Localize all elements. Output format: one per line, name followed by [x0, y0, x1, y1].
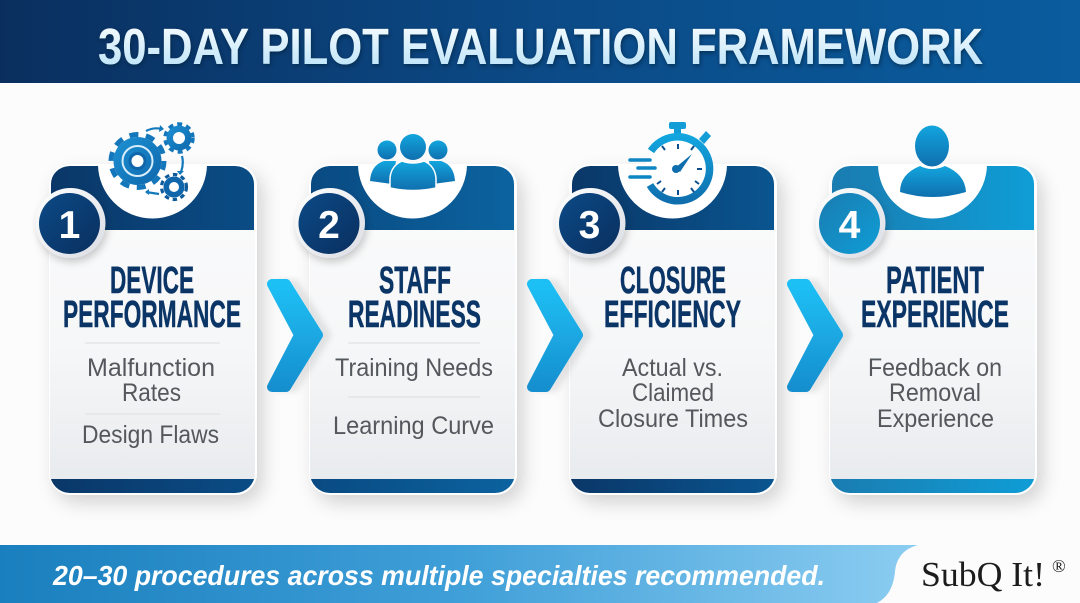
text: malfunction rates: Malfunction: [87, 354, 215, 382]
arrow 2: [532, 284, 578, 387]
icon: gears: [111, 124, 193, 200]
heading: PERFORMANCE: [63, 294, 241, 336]
logo: ®: [1052, 556, 1066, 576]
heading: EFFICIENCY: [604, 294, 741, 336]
footer banner: [0, 545, 918, 603]
title banner: [0, 0, 1080, 83]
heading: [348, 260, 481, 336]
badge 2: 2: [318, 204, 340, 247]
text: malfunction rates: [87, 354, 215, 407]
badge 1: [36, 188, 106, 258]
panel: device performance: [36, 110, 257, 495]
text: closure times: Actual vs.: [622, 354, 723, 382]
icon: team: [370, 134, 455, 190]
text: closure times: Claimed: [632, 379, 714, 407]
text: training needs: Training Needs: [335, 354, 493, 382]
heading: [861, 260, 1009, 336]
badge 3: [556, 188, 626, 258]
icon: person: [900, 126, 966, 197]
text: closure times: Closure Times: [598, 405, 748, 433]
arrow 3: [792, 284, 838, 387]
footer text: 20–30 procedures across multiple specialties recommended.: [52, 560, 825, 591]
heading: [63, 260, 241, 336]
text: feedback: Experience: [877, 405, 994, 433]
text: feedback: Removal: [889, 379, 981, 407]
text: closure times: [598, 354, 748, 433]
arrow 1: [272, 284, 318, 387]
text: feedback: Feedback on: [868, 354, 1002, 382]
badge 4: 4: [839, 204, 861, 247]
icon: stopwatch: [630, 122, 711, 201]
heading: PATIENT: [886, 260, 984, 302]
text: malfunction rates: Rates: [122, 379, 181, 407]
panel: closure efficiency: [556, 110, 777, 495]
badge 1: 1: [59, 204, 80, 247]
heading: STAFF: [379, 260, 451, 302]
text: design flaws: Design Flaws: [82, 421, 219, 449]
logo: SubQ It!: [921, 555, 1045, 594]
heading: READINESS: [348, 294, 481, 336]
heading: [604, 260, 741, 336]
panel: patient experience: [816, 110, 1037, 495]
badge 4: [816, 188, 886, 258]
heading: DEVICE: [110, 260, 194, 302]
panel: staff readiness: [295, 110, 517, 495]
badge 2: [295, 188, 365, 258]
text: feedback: [868, 354, 1002, 433]
badge 3: 3: [579, 204, 600, 247]
heading: CLOSURE: [620, 260, 726, 302]
text: learning curve: Learning Curve: [333, 412, 494, 440]
